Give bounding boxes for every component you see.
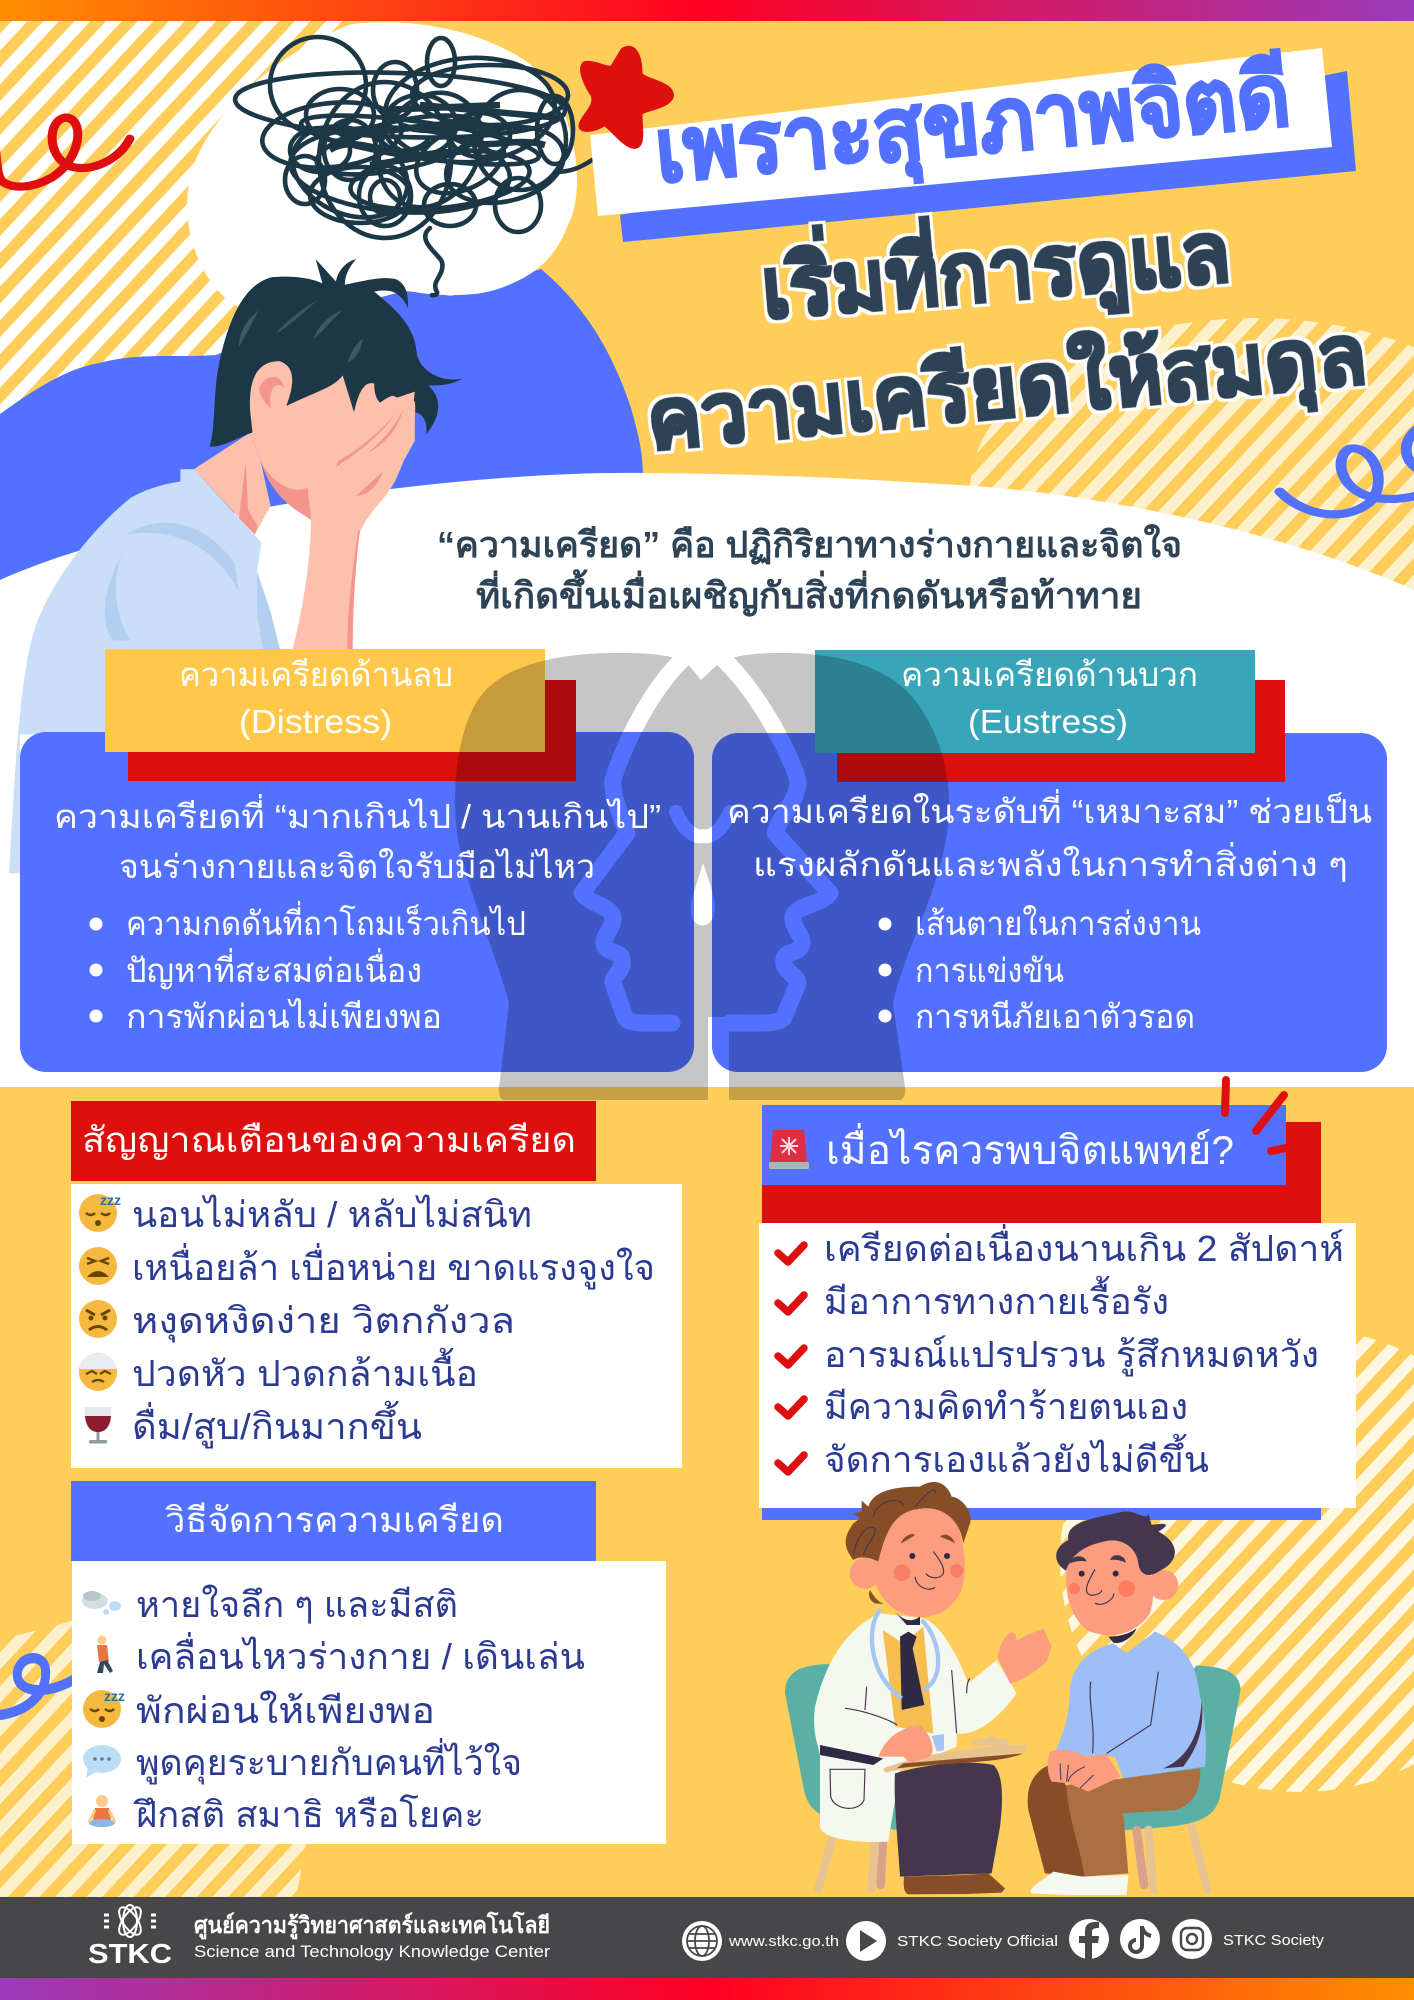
item: จัดการเองแล้วยังไม่ดีขึ้น [824,1433,1209,1480]
icon: bandaged face [79,1353,117,1391]
header blue [762,1105,1286,1185]
eustress header shadow [837,680,1285,782]
ear [248,362,293,417]
doctor gesturing hand [997,1628,1052,1683]
doctor head [873,1503,965,1617]
item: ฝึกสติ สมาธิ หรือโยคะ [133,1794,484,1835]
check [778,1295,804,1312]
distress description [54,794,661,885]
item: ดื่ม/สูบ/กินมากขึ้น [132,1400,422,1449]
striped background: top left [0,21,350,414]
icon: tired face [79,1247,117,1285]
item: หงุดหงิดง่าย วิตกกังวล [132,1300,515,1343]
distress header text: (Distress) [239,703,392,740]
check [778,1245,804,1262]
white content band [0,473,1414,1087]
icon: meditating person [89,1795,115,1827]
chair legs [818,1827,1207,1890]
vest [883,1627,933,1733]
hand [311,396,415,530]
illustration: stressed man [9,259,462,873]
warning signs header [71,1101,596,1181]
stethoscope [872,1609,938,1698]
hair highlights [239,300,363,363]
striped background: bottom right [1060,1328,1414,1792]
management header [71,1481,596,1561]
face [248,359,415,526]
ID tag [932,1734,944,1752]
item: เครียดต่อเนื่องนานเกิน 2 สัปดาห์ [824,1224,1344,1269]
eustress header box [815,650,1255,753]
eustress list [878,905,1201,1035]
distress header shadow [128,680,576,781]
definition text [437,523,1182,617]
panel: warning signs [71,1101,682,1468]
icon: walking person [97,1636,113,1673]
warning signs heading text: สัญญาณเตือนของความเครียด [82,1121,576,1160]
icon: siren [769,1130,809,1169]
footer links [682,1919,1325,1961]
icon: play [846,1921,886,1961]
finger lines [1060,1763,1093,1788]
distress description: จนร่างกายและจิตใจรับมือไม่ไหว [119,848,595,885]
check [778,1399,804,1416]
scribble thought [234,29,592,295]
doctor hair [846,1482,971,1562]
doctor lower hand [878,1725,933,1763]
eustress header text [901,656,1198,740]
patient shoes [1031,1872,1128,1895]
item: หายใจลึก ๆ และมีสติ [136,1584,458,1625]
check [778,1348,804,1365]
item: มีอาการทางกายเรื้อรัง [824,1275,1169,1322]
arm [291,514,361,657]
doctor trousers [895,1763,1002,1877]
ghost head watermark [455,653,949,1100]
patient shirt [1053,1632,1206,1778]
warning signs list box [71,1184,682,1468]
youtube name: STKC Society Official [897,1933,1058,1950]
icon: facebook [1069,1919,1109,1959]
top gradient bar [0,0,1414,21]
icon: angry face [79,1300,117,1338]
patient hands [1048,1750,1121,1792]
star icon [579,46,674,149]
bottom blue strip [762,1500,1321,1520]
instagram name: STKC Society [1223,1932,1325,1949]
footer [0,1897,1414,1978]
finger lines [336,408,404,496]
hair [210,259,462,447]
bottom gradient bar [0,1978,1414,2000]
collar [895,1612,920,1625]
eustress description: แรงผลักดันและพลังในการทำสิ่งต่าง ๆ [753,842,1348,883]
title line 2: เริ่มที่การดูแล [757,193,1234,342]
icon: atom [104,1904,156,1938]
patient arm lines [1090,1672,1158,1753]
blue wave shape [0,269,643,600]
distress list [90,901,526,1035]
coat lines [830,1670,970,1808]
doctor ear and neck hair [850,1558,884,1604]
clipboard [883,1745,1027,1773]
footer organisation name: ศูนย์ความรู้วิทยาศาสตร์และเทคโนโลยี [194,1911,550,1940]
icon: sleeping face [83,1688,125,1728]
icon: sleeping face: zzz [100,1192,121,1208]
icon: sleeping face: zzz [104,1688,125,1704]
patient face details [1069,1555,1135,1604]
illustration: doctor and patient [785,1482,1241,1895]
icon: tiktok [1120,1919,1160,1959]
patient collar [1108,1628,1137,1643]
panel: stress management [71,1481,666,1844]
item: เหนื่อยล้า เบื่อหน่าย ขาดแรงจูงใจ [132,1243,655,1290]
patient trousers [1028,1763,1085,1877]
header red backing [762,1122,1321,1223]
eustress list: เส้นตายในการส่งงาน [915,905,1201,942]
management heading text: วิธีจัดการความเครียด [165,1501,504,1540]
eustress header text: ความเครียดด้านบวก [901,656,1198,693]
item: พูดคุยระบายกับคนที่ไว้ใจ [136,1738,522,1785]
title line 3: ความเครียดให้สมดุล [643,306,1371,473]
distress list: การพักผ่อนไม่เพียงพอ [126,998,442,1035]
eustress header text: (Eustress) [968,703,1128,740]
icon: wine glass [85,1407,111,1444]
distress header box [105,649,545,752]
eustress list: การหนีภัยเอาตัวรอด [915,998,1195,1035]
icon: globe [682,1921,722,1961]
icon: alert marks [1225,1080,1286,1151]
item: เคลื่อนไหวร่างกาย / เดินเล่น [136,1632,585,1677]
neck shade [239,461,258,534]
chairs [785,1664,1241,1830]
STKC wordmark: STKC [88,1938,172,1969]
striped background: bottom left [0,1621,306,1897]
title line 1: เพราะสุขภาพจิตดี [651,45,1295,207]
patient ear [1148,1570,1178,1600]
title banner shadow [620,71,1356,242]
item: พักผ่อนให้เพียงพอ [136,1690,435,1731]
item: มีความคิดทำร้ายตนเอง [824,1386,1188,1427]
item: อารมณ์แปรปรวน รู้สึกหมดหวัง [824,1334,1319,1377]
patient hair [1056,1512,1175,1575]
management list box [72,1561,666,1844]
distress list: ความกดดันที่ถาโถมเร็วเกินไป [126,901,526,942]
distress description: ความเครียดที่ “มากเกินไป / นานเกินไป” [54,794,661,835]
definition text: ที่เกิดขึ้นเมื่อเผชิญกับสิ่งที่กดดันหรือท้าทาย [476,569,1142,617]
panel: when to see a psychiatrist [759,1080,1356,1520]
item: ปวดหัว ปวดกล้ามเนื้อ [132,1347,478,1394]
item: นอนไม่หลับ / หลับไม่สนิท [132,1194,532,1235]
distress header text [179,656,453,740]
doctor face details [853,1490,963,1589]
website: www.stkc.go.th [728,1933,839,1950]
panel: distress background [20,732,694,1072]
jaw shade [261,461,311,519]
eustress description [727,789,1372,883]
check [778,1455,804,1472]
patient head [1066,1537,1153,1635]
eustress description: ความเครียดในระดับที่ “เหมาะสม” ช่วยเป็น [727,789,1372,830]
footer logo [88,1904,172,1969]
eustress list: การแข่งขัน [915,952,1064,989]
striped background: top right [970,318,1414,662]
footer organisation name: Science and Technology Knowledge Center [194,1942,550,1961]
definition text: “ความเครียด” คือ ปฏิกิริยาทางร่างกายและจิตใจ [437,523,1182,565]
neck [194,432,271,534]
distress list: ปัญหาที่สะสมต่อเนื่อง [126,948,422,989]
icon: speech bubble [83,1745,121,1778]
squiggle: red [0,118,130,187]
panel: eustress background [712,733,1387,1072]
shirt shadow folds [105,523,282,657]
list box [759,1223,1356,1508]
heading text: เมื่อไรควรพบจิตแพทย์? [826,1123,1234,1173]
squiggle: blue bottom left [0,1658,77,1715]
doctor coat [814,1613,1017,1842]
distress header text: ความเครียดด้านลบ [179,656,453,693]
icon: exhale [82,1591,121,1615]
icon: sleeping face [79,1192,121,1232]
tie [900,1632,924,1710]
footer organisation name [194,1911,550,1961]
shirt [9,469,282,873]
belt shadow [820,1745,883,1765]
title banner [590,48,1332,216]
doctor shoes [904,1873,1005,1894]
icon: instagram [1172,1919,1212,1959]
thought bubble [187,22,577,326]
squiggle: blue right [1280,424,1414,514]
